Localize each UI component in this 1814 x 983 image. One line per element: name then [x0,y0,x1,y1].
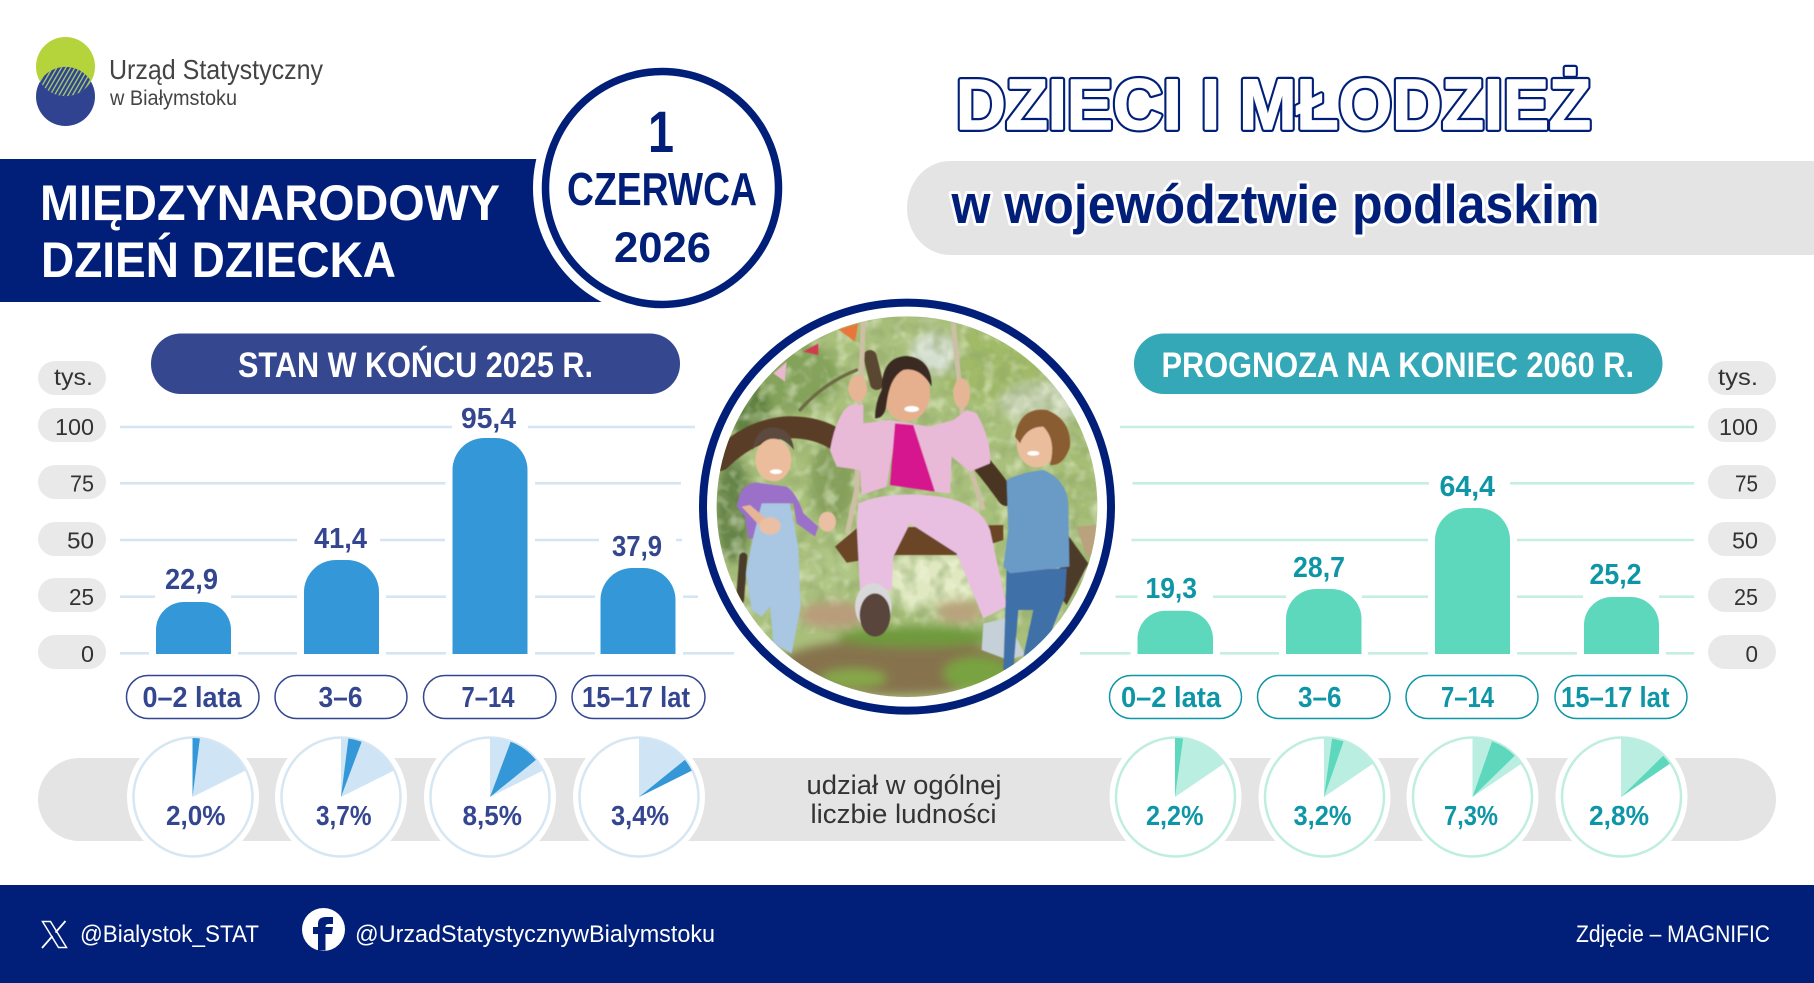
right chart: prognoza na koniec 2060 r. [1080,334,1776,718]
logo text: Urząd Statystyczny [109,54,323,85]
right bar values: 28,7 [1293,552,1345,584]
left bar values: 41,4 [314,523,367,555]
pie: 2,0%: 2,0% [166,800,226,831]
pie: 3,2% [1258,731,1390,863]
strip caption: udział w ogólnej [806,770,1002,800]
footer [0,885,1814,983]
right axis labels: 0 [1746,641,1758,667]
X handle: @Bialystok_STAT [80,921,259,948]
left chart: stan w końcu 2025 r. [38,334,734,718]
swing seat [835,525,1003,563]
right chart heading [1134,334,1662,394]
subtitle text: w województwie podlaskim [951,173,1600,235]
pie: 8,5% [424,731,556,863]
date text: CZERWCA [567,163,757,215]
main title: DZIECI I MŁODZIEŻ [956,66,1591,145]
icon: Facebook [302,908,345,951]
right axis labels: 100 [1719,414,1758,440]
left bars [156,438,676,654]
left axis labels: tys. [54,364,93,390]
right bar values: 19,3 [1146,573,1197,605]
share of population strip [38,731,1776,863]
banner heading [40,175,500,288]
banner: Międzynarodowy Dzień Dziecka [0,159,640,302]
left age labels: 15–17 lat [582,682,690,714]
pie: 2,2% [1110,731,1242,863]
left axis labels: 100 [55,414,94,440]
right axis labels: 50 [1732,528,1758,554]
right age labels [1110,676,1687,718]
left axis labels: 75 [70,470,94,496]
pie: 3,7%: 3,7% [316,800,372,831]
subtitle pill [907,161,1814,255]
pie: 2,8% [1556,731,1688,863]
right bars [1138,508,1659,654]
right chart heading: PROGNOZA NA KONIEC 2060 R. [1162,346,1634,385]
right axis labels [1708,361,1776,669]
logo text [109,54,323,110]
right age labels: 0–2 lata [1121,682,1222,714]
right age labels: 3–6 [1298,682,1342,714]
Facebook handle: @UrzadStatystycznywBialymstoku [355,921,715,948]
date text: 1 [648,100,674,165]
pie: 2,0% [127,731,259,863]
pie: 8,5%: 8,5% [462,800,522,831]
left axis labels: 50 [67,528,94,554]
left bar values [165,403,662,596]
photo credit: Zdjęcie – MAGNIFIC [1576,921,1770,948]
left axis labels: 25 [69,584,94,610]
date badge: 1 czerwca 2026 [533,59,791,317]
right bar values: 64,4 [1440,471,1495,503]
banner heading: DZIEŃ DZIECKA [41,232,396,288]
boy on the right [1003,568,1067,670]
logo text: w Białymstoku [109,87,237,110]
pie: 3,4% [573,731,705,863]
left age labels: 3–6 [318,682,362,714]
right axis labels: 75 [1735,470,1758,496]
left age labels: 0–2 lata [142,682,242,714]
bunting flags [838,323,858,342]
girl on the left [737,483,818,538]
right bar values: 25,2 [1590,559,1642,591]
left bar values: 37,9 [612,531,662,563]
pie: 2,8%: 2,8% [1589,800,1649,831]
girl on the swing [857,494,1007,618]
pie: 7,3%: 7,3% [1444,800,1498,831]
left bar values: 95,4 [461,403,516,435]
main title: DZIECI I MŁODZIEŻ [956,66,1591,145]
left bar values: 22,9 [165,564,218,596]
central photo: children on a swing [703,303,1111,711]
swing ropes [847,322,983,533]
left age labels: 7–14 [462,682,514,714]
strip caption: liczbie ludności [810,799,996,829]
right age labels: 7–14 [1441,682,1494,714]
logo: Urząd Statystyczny w Białymstoku [18,37,323,126]
pie: 3,2%: 3,2% [1294,800,1352,831]
left axis labels [38,361,106,669]
date text [567,100,757,272]
right axis labels: tys. [1718,364,1758,390]
pie: 2,2%: 2,2% [1146,800,1204,831]
date text: 2026 [614,224,711,272]
pie: 3,7% [275,731,407,863]
right age labels: 15–17 lat [1561,682,1670,714]
strip caption [806,770,1002,829]
right axis labels: 25 [1734,584,1758,610]
left chart heading: STAN W KOŃCU 2025 R. [238,345,593,385]
logo mark: overlapping circles [36,37,95,126]
banner heading: MIĘDZYNARODOWY [40,175,500,231]
left axis labels: 0 [81,641,94,667]
left age labels [126,676,705,718]
tree branches [720,357,1007,600]
icon: X [42,921,66,948]
pie: 7,3% [1406,731,1538,863]
left chart heading [151,334,680,394]
pie: 3,4%: 3,4% [611,800,669,831]
right bar values [1146,471,1642,605]
